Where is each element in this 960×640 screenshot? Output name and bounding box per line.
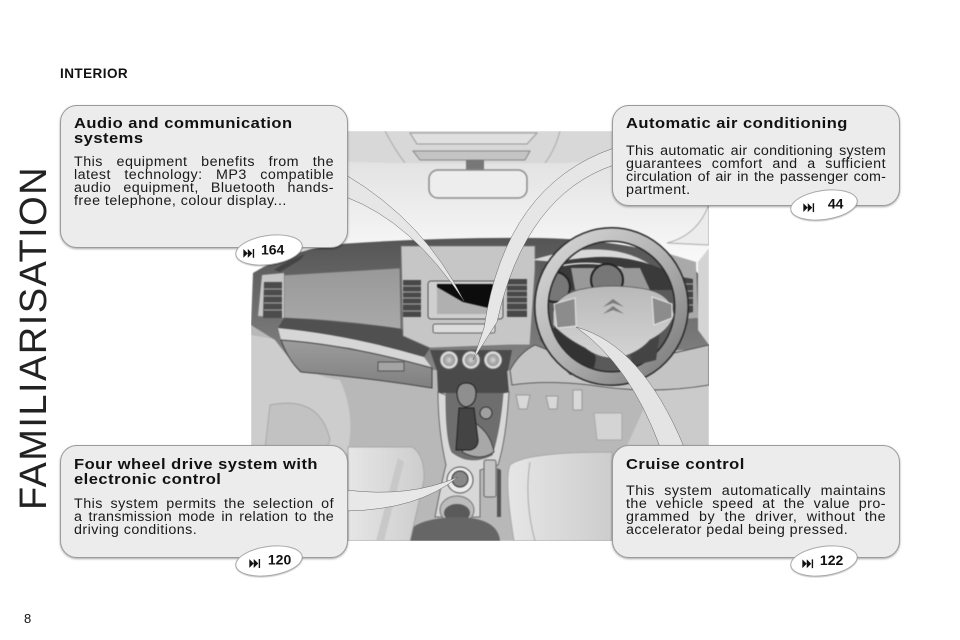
page reference: 164: 164: [261, 241, 284, 257]
text block: circulation of air in the passenger com-: [626, 169, 886, 184]
text block: [74, 154, 334, 208]
heading: [74, 456, 318, 488]
text block: latest technology: MP3 compatible: [74, 167, 334, 182]
page reference: 164: [233, 230, 305, 270]
page reference: 122: 122: [820, 552, 843, 568]
left vent: [258, 273, 284, 318]
text block: This system permits the selection of: [74, 496, 334, 511]
text block: This automatic air conditioning system: [626, 143, 886, 158]
text block: grammed by the driver, without the: [626, 509, 886, 524]
panel: cruise control: [612, 445, 900, 558]
floor and door trims: [251, 320, 709, 541]
text block: accelerator pedal being pressed.: [626, 522, 848, 537]
interior illustration: [251, 131, 709, 541]
multimedia screen: [428, 281, 503, 333]
page reference: 120: [233, 541, 305, 581]
heading: electronic control: [74, 471, 221, 488]
heading: systems: [74, 130, 144, 147]
text block: free telephone, colour display...: [74, 193, 287, 208]
text block: [74, 496, 334, 537]
page number: 8: [24, 611, 31, 626]
page reference: 44: [788, 185, 860, 225]
heading: Audio and communication: [74, 115, 293, 132]
section title: INTERIOR: [60, 66, 128, 81]
climate control knobs: [430, 350, 512, 371]
instrument cluster: [532, 249, 680, 375]
transmission rotary selector: [447, 467, 473, 493]
text block: [626, 483, 886, 537]
text block: This system automatically maintains: [626, 483, 886, 498]
right vent: [670, 254, 698, 319]
page reference: 44: 44: [828, 195, 843, 211]
panel: audio and communication systems: [60, 105, 348, 248]
text block: audio equipment, Bluetooth hands-: [74, 180, 334, 195]
text block: driving conditions.: [74, 522, 197, 537]
dashboard: [251, 238, 709, 388]
pedals: [516, 390, 582, 410]
callout pointer: audio: [346, 175, 464, 301]
callout pointer: air conditioning: [473, 148, 614, 360]
text block: partment.: [626, 182, 691, 197]
right lower dash: [510, 345, 709, 390]
text block: the vehicle speed at the value pro-: [626, 496, 886, 511]
heading: Automatic air conditioning: [626, 115, 848, 132]
centre console with gear lever: [403, 370, 509, 541]
page reference: 122: [788, 541, 860, 581]
text block: a transmission mode in relation to the: [74, 509, 334, 524]
heading: Four wheel drive system with: [74, 456, 318, 473]
panel: automatic air conditioning: [612, 105, 900, 206]
heading: Cruise control: [626, 456, 745, 473]
page reference: 120: 120: [268, 552, 291, 568]
text block: guarantees comfort and a sufficient: [626, 156, 886, 171]
vertical chapter title: FAMILIARISATION: [13, 166, 55, 510]
windscreen and roof lining: [302, 131, 709, 253]
heading: [74, 115, 293, 147]
text block: This equipment benefits from the: [74, 154, 334, 169]
panel: four wheel drive system: [60, 445, 348, 558]
callout pointer: drive selector: [346, 477, 458, 511]
steering wheel: [542, 234, 682, 378]
front seats: [348, 447, 612, 541]
text block: [626, 143, 886, 197]
callout pointer: cruise control: [576, 327, 684, 447]
centre stack: [401, 246, 535, 348]
